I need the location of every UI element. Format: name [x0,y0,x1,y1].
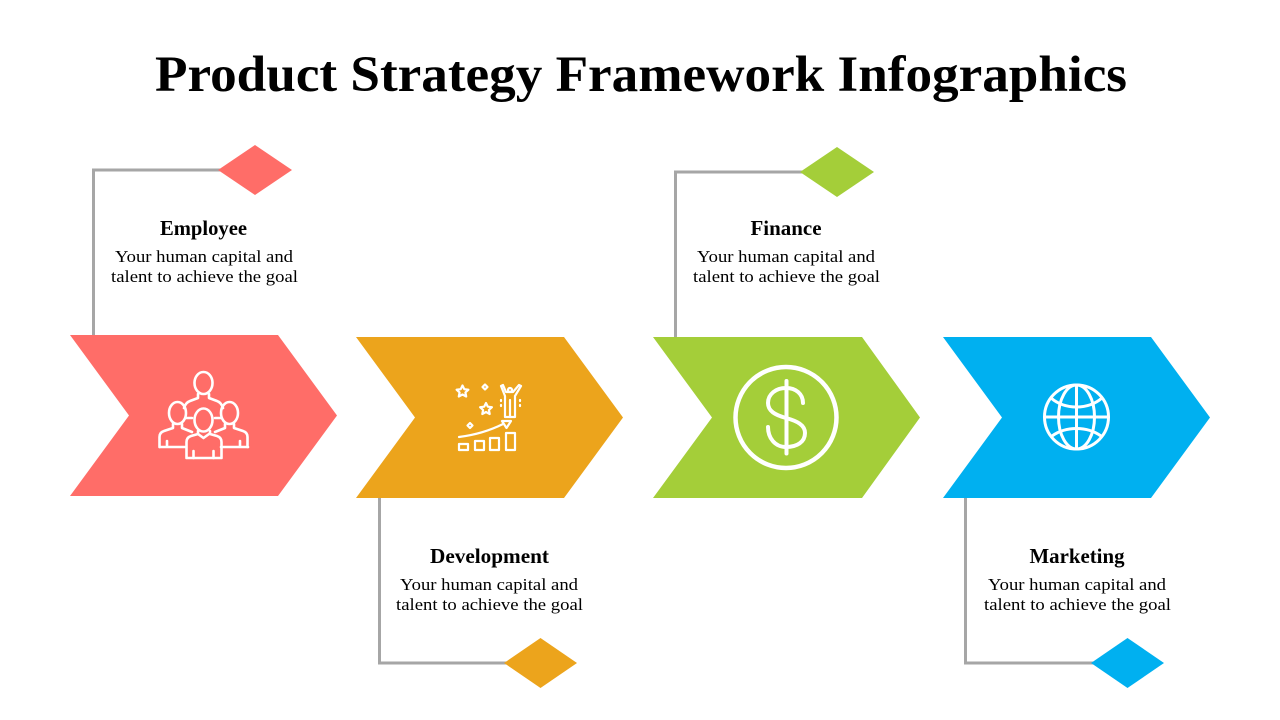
connector: employee [94,170,222,336]
text: employee description: talent to achieve the goal [111,267,298,286]
text: finance description: Your human capital and [697,247,876,266]
chevron: employee [70,335,337,496]
text: finance description: talent to achieve the goal [693,267,880,286]
text: marketing description: Your human capital and [988,575,1167,594]
text: employee description [111,247,298,286]
heading: development: Development [430,544,549,568]
heading: finance: Finance [750,216,822,240]
diamond: finance [800,147,874,197]
panel: marketing [943,337,1210,688]
connector: development [380,497,508,663]
title: Product Strategy Framework Infographics [155,47,1127,103]
text: development description [396,575,583,614]
diamond: marketing [1091,638,1164,688]
icon: growth and celebration [457,384,521,450]
text: finance description [693,247,880,286]
icon: globe [1044,385,1108,449]
icon: team of people [160,372,248,458]
text: marketing description [984,575,1171,614]
chevron: marketing [943,337,1210,498]
text: development description: talent to achieve the goal [396,595,583,614]
chevron: development [356,337,623,498]
connector: marketing [966,497,1095,663]
text: marketing description: talent to achieve the goal [984,595,1171,614]
text: development description: Your human capital and [400,575,579,594]
panel: finance [653,147,920,498]
connector: finance [676,172,804,338]
heading: employee: Employee [160,216,247,240]
panel: development [356,337,623,688]
panel: employee [70,145,337,496]
text: employee description: Your human capital and [115,247,294,266]
heading: marketing: Marketing [1030,544,1125,568]
diamond: development [504,638,577,688]
icon: dollar coin [736,367,836,468]
chevron: finance [653,337,920,498]
diamond: employee [218,145,292,195]
